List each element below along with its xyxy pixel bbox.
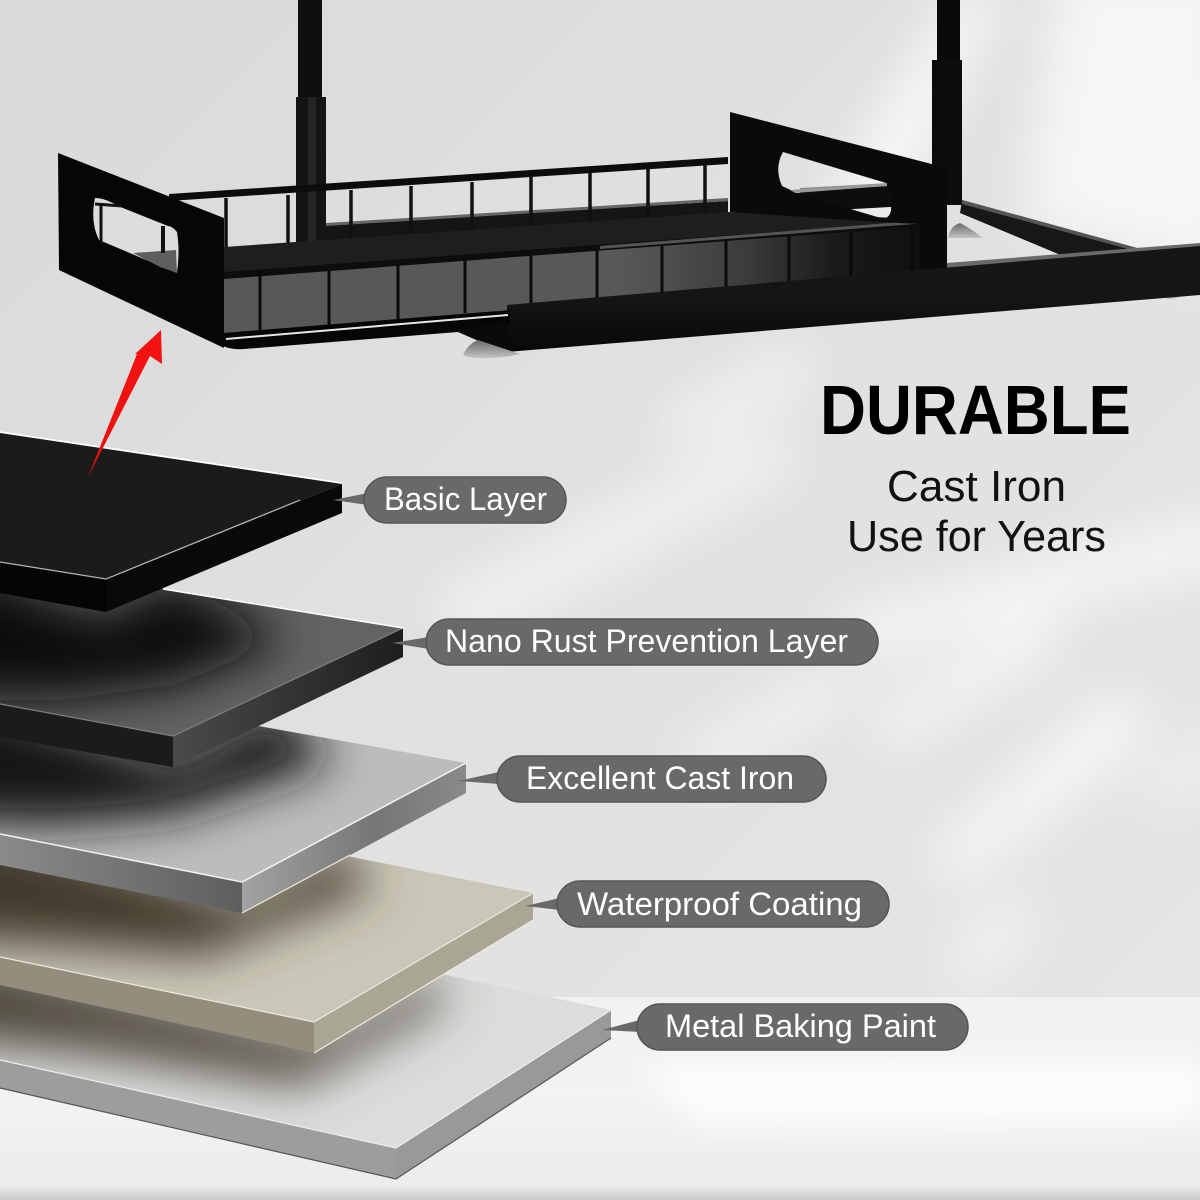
layer 1: basic layer plate — [0, 432, 342, 612]
label: Metal Baking Paint: Metal Baking Paint — [665, 1008, 936, 1044]
label: Waterproof Coating — [525, 881, 889, 927]
product: pull-out basket rack — [58, 0, 1200, 358]
front wire panel cells — [224, 219, 945, 335]
label: Basic Layer — [333, 477, 566, 523]
subheading: Cast Iron Use for Years — [847, 462, 1106, 561]
layer 4: waterproof coating plate — [0, 856, 533, 1054]
label: Nano Rust Prevention Layer: Nano Rust Prevention Layer — [445, 623, 848, 659]
bottom rail of basket — [223, 310, 510, 352]
right end panel with handle hole — [730, 112, 947, 272]
rubber foot under beam — [463, 340, 520, 358]
subheading: Cast Iron Use for Years: Cast Iron — [887, 462, 1066, 511]
back rail of basket — [169, 157, 728, 248]
label: Excellent Cast Iron — [458, 756, 826, 802]
heading: DURABLE: DURABLE — [820, 371, 1131, 449]
label: Excellent Cast Iron: Excellent Cast Iron — [526, 760, 794, 796]
label: Basic Layer: Basic Layer — [384, 481, 547, 517]
subheading: Cast Iron Use for Years: Use for Years — [847, 512, 1106, 561]
basket floor — [224, 212, 900, 276]
label: Nano Rust Prevention Layer — [392, 619, 878, 665]
left vertical post — [296, 0, 326, 242]
layer 3: cast iron plate — [0, 726, 466, 914]
label: Metal Baking Paint — [602, 1004, 968, 1050]
layer 5: metal baking paint plate — [0, 880, 611, 1179]
right vertical post — [932, 0, 962, 205]
layer 2: nano rust prevention plate — [0, 588, 404, 767]
rear frame rail and rubber foot — [800, 180, 1182, 299]
left end panel with handle hole — [58, 153, 224, 348]
label: Waterproof Coating: Waterproof Coating — [577, 886, 862, 922]
arrow: red pointer from plate to basket — [88, 330, 162, 477]
frame bar and front beam — [507, 243, 1200, 352]
